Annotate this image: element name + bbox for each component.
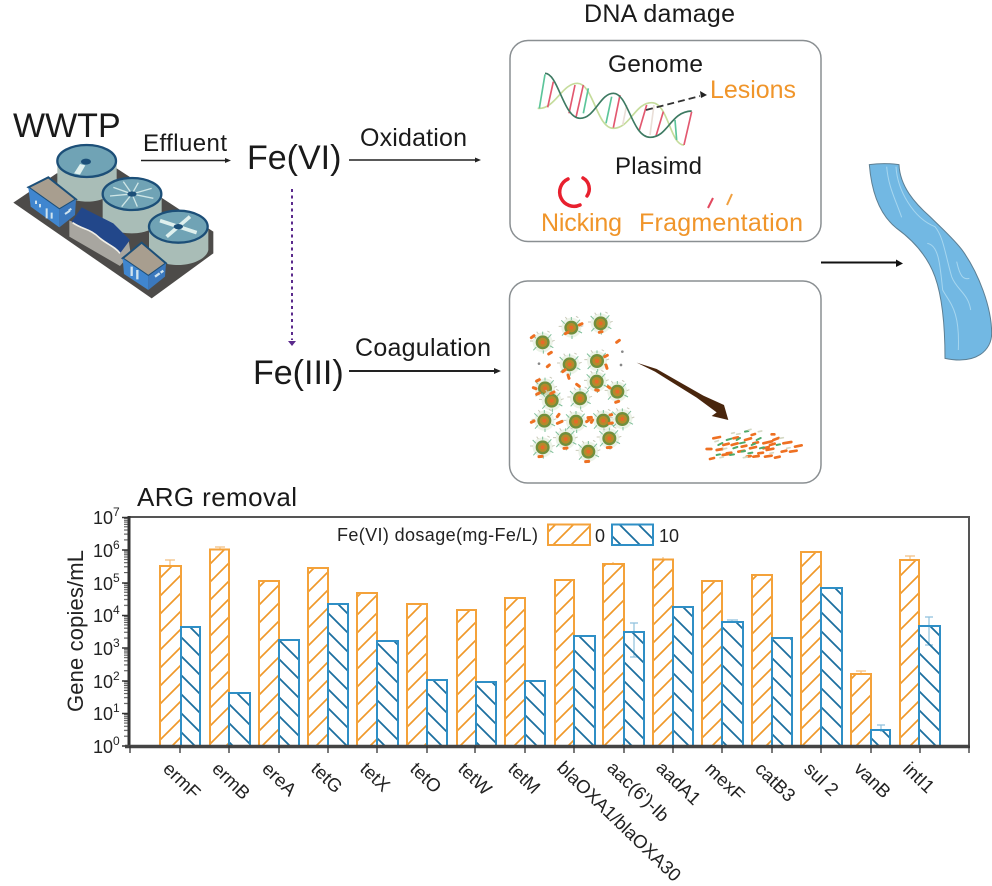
icon: nicked plasmid	[560, 178, 589, 206]
arrow: coagulation	[349, 368, 501, 374]
x axis gene labels	[159, 757, 939, 885]
label: Fe(III): Fe(III)	[253, 354, 344, 392]
arrow: Fe(VI) to Fe(III) dotted	[288, 189, 296, 346]
arrow: oxidation	[349, 158, 481, 162]
y axis tick labels: 1	[113, 701, 120, 715]
label: Effluent: Effluent	[143, 130, 227, 157]
x axis gene labels: tetM	[504, 758, 545, 798]
y axis tick labels: 4	[113, 603, 120, 617]
legend: Fe(VI) dosage(mg-Fe/L)	[337, 525, 538, 545]
label: Lesions: Lesions	[710, 76, 796, 104]
arrow: dashed to lesions	[646, 91, 707, 110]
axes	[122, 516, 970, 753]
x axis gene labels: tetX	[356, 758, 394, 796]
label: Fe(VI): Fe(VI)	[247, 139, 341, 177]
label: Plasimd: Plasimd	[615, 153, 702, 180]
error bars	[165, 547, 933, 732]
y axis tick labels: 5	[113, 571, 120, 585]
heading: ARG removal: ARG removal	[137, 482, 297, 512]
x axis gene labels: mexF	[701, 758, 749, 805]
label: Coagulation: Coagulation	[355, 334, 491, 362]
heading: DNA damage: DNA damage	[584, 0, 735, 28]
x axis gene labels: tetW	[454, 758, 497, 800]
y axis tick labels: 2	[113, 669, 120, 683]
arrow: to river	[821, 260, 903, 267]
y axis tick labels: 10	[93, 541, 113, 561]
y axis tick labels: 3	[113, 636, 120, 650]
y axis tick labels: 10	[93, 704, 113, 724]
x axis gene labels: tetG	[307, 758, 347, 797]
legend: 10	[659, 526, 679, 546]
x axis gene labels: vanB	[850, 758, 895, 802]
bar chart: gene copies per mL	[63, 505, 970, 885]
arrow: effluent to Fe(VI)	[141, 158, 231, 163]
y axis tick labels: 10	[93, 508, 113, 528]
x axis gene labels: blaOXA1/blaOXA30	[553, 757, 685, 885]
x axis gene labels: catB3	[751, 758, 800, 806]
x axis gene labels: tetO	[406, 758, 446, 797]
x axis gene labels: ermF	[159, 758, 205, 803]
icon: DNA fragments	[708, 194, 732, 208]
y axis title: Gene copies/mL	[63, 550, 88, 712]
y axis tick labels: 10	[93, 606, 113, 626]
y axis tick labels: 10	[93, 574, 113, 594]
label: Genome: Genome	[608, 51, 703, 78]
label: Oxidation: Oxidation	[360, 124, 467, 152]
bars: no Fe(VI)	[160, 550, 919, 746]
label: Nicking: Nicking	[541, 209, 622, 237]
bars: 10 mg-Fe/L Fe(VI)	[181, 588, 940, 746]
legend	[337, 524, 679, 546]
x axis gene labels: aadA1	[652, 757, 705, 809]
title: WWTP: WWTP	[13, 107, 121, 145]
y axis tick labels	[93, 505, 120, 757]
y axis tick labels: 0	[113, 734, 120, 748]
x axis gene labels: aac(6')-Ib	[603, 757, 674, 826]
legend: 0	[595, 526, 605, 546]
icon: DNA helix	[538, 73, 692, 145]
icon: river	[869, 164, 992, 360]
panel: coagulation	[510, 281, 821, 483]
y axis tick labels: 10	[93, 737, 113, 757]
x axis gene labels: sul 2	[800, 758, 843, 800]
x axis gene labels: ereA	[258, 758, 301, 800]
panel: DNA damage	[510, 40, 821, 242]
y axis tick labels: 10	[93, 639, 113, 659]
y axis tick labels: 7	[113, 505, 120, 519]
x axis gene labels: ermB	[208, 758, 255, 804]
icon: wastewater treatment plant	[13, 145, 213, 298]
y axis tick labels: 6	[113, 538, 120, 552]
label: Fragmentation: Fragmentation	[639, 209, 803, 237]
icon: dispersed particles and settled floc	[530, 312, 802, 463]
y axis tick labels: 10	[93, 672, 113, 692]
x axis gene labels: intI1	[899, 758, 939, 797]
